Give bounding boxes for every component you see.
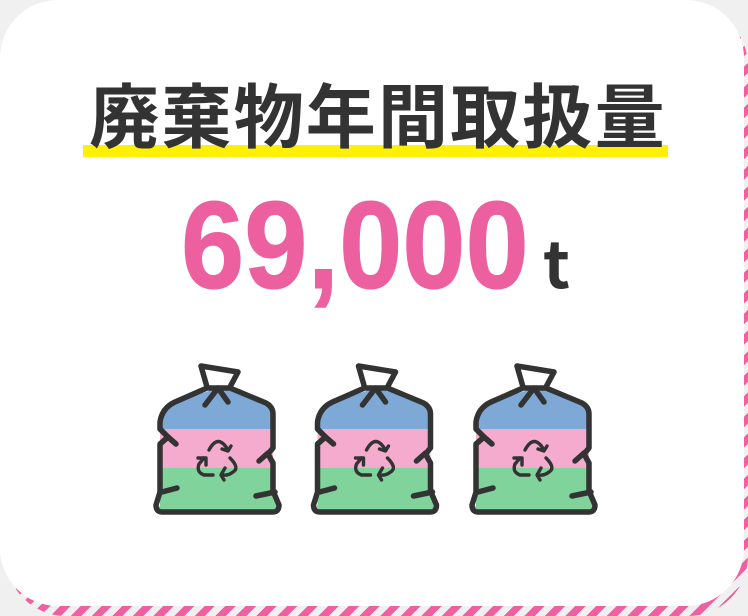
big number: 69,000 bbox=[181, 177, 529, 315]
icon: garbage bag 2 bbox=[308, 366, 442, 514]
unit: t bbox=[543, 215, 570, 307]
title: 廃棄物年間取扱量 bbox=[89, 62, 667, 163]
icons: three garbage bags bbox=[153, 363, 598, 515]
icon: garbage bag 3 bbox=[466, 366, 601, 514]
icon: garbage bag 1 bbox=[150, 366, 285, 514]
yellow title underline bbox=[83, 145, 668, 157]
